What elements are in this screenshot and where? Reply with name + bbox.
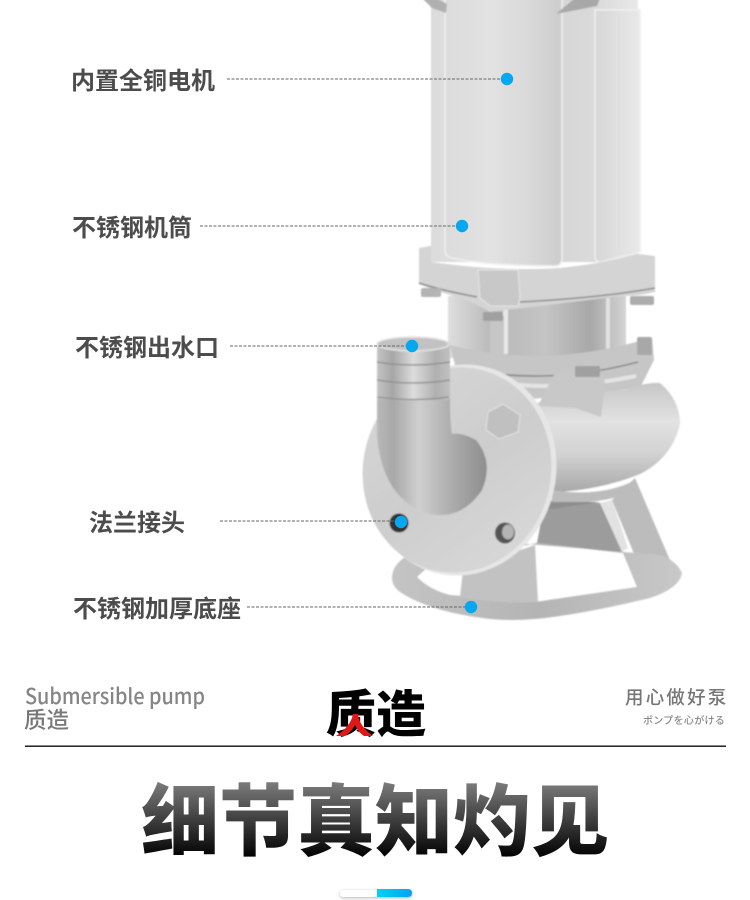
callout: 不锈钢加厚底座: 不锈钢加厚底座 <box>73 589 241 624</box>
elbow discharge pipe <box>377 337 487 515</box>
back support legs <box>537 478 672 588</box>
pump photo <box>344 0 682 620</box>
callout: 不锈钢机筒 <box>72 208 468 243</box>
callout: 内置全铜电机 <box>71 61 513 96</box>
pump motor housing <box>422 0 640 266</box>
title: 细节真知灼见 <box>141 760 609 872</box>
callout: 法兰接头 <box>89 503 407 538</box>
header left: product name: 质造 <box>24 703 69 735</box>
header right: slogan: 用心做好泵 <box>625 684 729 710</box>
callout: 不锈钢出水口: 不锈钢出水口 <box>75 328 219 363</box>
discharge flange disc <box>344 347 576 593</box>
flange bolt holes <box>390 514 515 544</box>
bolted lug <box>538 366 605 417</box>
motor collar flange <box>419 246 655 321</box>
header left: product name <box>24 680 205 735</box>
page indicator <box>340 889 412 897</box>
volute casing shoulder <box>450 337 654 400</box>
callout: 内置全铜电机: 内置全铜电机 <box>71 61 215 96</box>
header divider <box>25 746 726 747</box>
callout: 不锈钢出水口 <box>75 328 418 363</box>
center support leg <box>460 545 538 602</box>
header right: slogan: ポンプを心がける <box>643 712 725 727</box>
callout: 不锈钢加厚底座 <box>73 589 477 624</box>
header left: product name: Submersible pump <box>25 680 205 711</box>
hex bolt <box>486 404 520 439</box>
pump neck <box>448 296 626 358</box>
header center: brand logo: 质造 <box>326 675 426 747</box>
header right: slogan <box>625 684 729 727</box>
callout: 不锈钢机筒: 不锈钢机筒 <box>72 208 192 243</box>
volute casing <box>530 383 680 510</box>
base ring <box>392 540 682 620</box>
callout: 法兰接头: 法兰接头 <box>89 503 185 538</box>
